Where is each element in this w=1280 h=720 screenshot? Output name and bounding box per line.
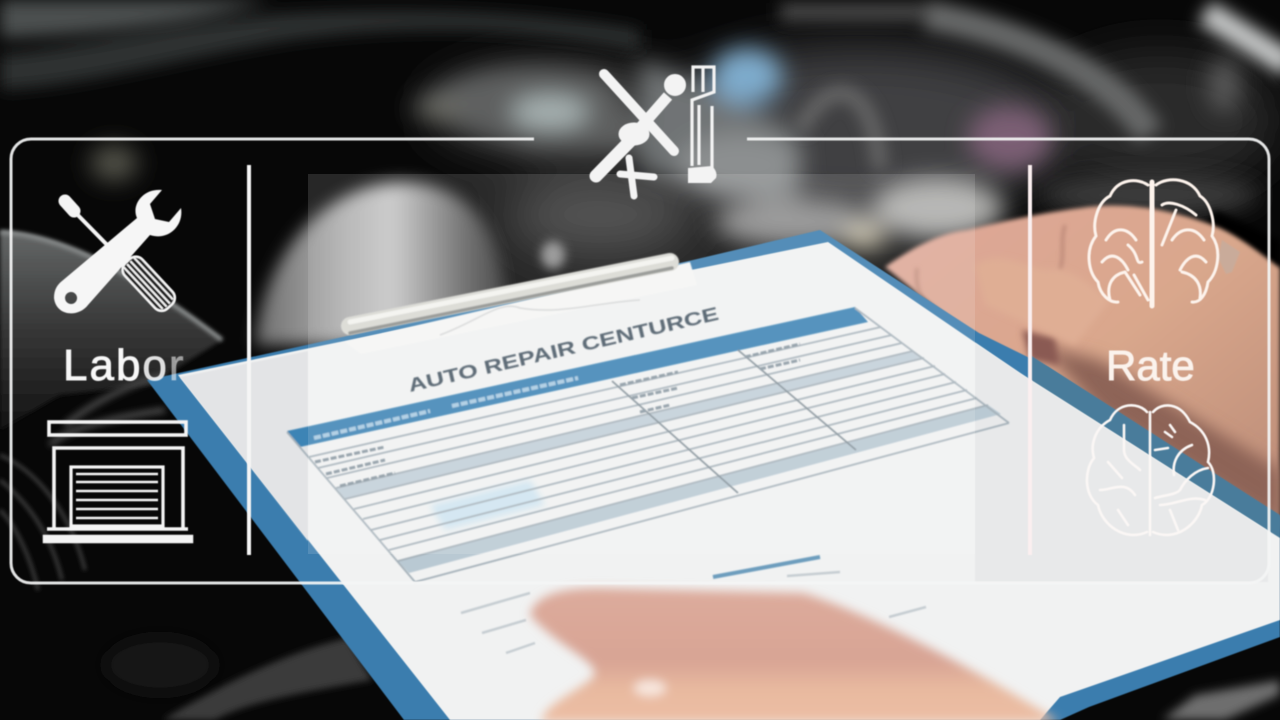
icon: top brain [1089,180,1218,306]
form heading: AUTO REPAIR CENTURCE [406,304,721,396]
divider: left [247,165,251,555]
outer frame with top gap [11,139,1269,583]
label: Labor: Labor [63,341,186,390]
panel: labor [44,190,192,542]
icon: garage [44,422,192,542]
clip bar [350,258,672,333]
paper tint inside the frame [180,351,308,541]
hand writing at the bottom [530,588,1060,720]
clip sheet [345,262,697,354]
form table [287,307,1009,653]
hand holding the clipboard [885,205,1280,530]
clipboard with repair form [147,230,1280,720]
label: Rate: Rate [1106,342,1195,389]
wristwatch band [1218,240,1240,274]
engine hose behind panel [255,182,505,345]
icon: screwdriver and wrench [54,190,181,315]
clipboard board [147,230,1280,720]
top centre icon: crossed tools [596,67,716,196]
divider: right [1028,165,1032,555]
panel: rate [1087,180,1218,535]
icon: bottom brain [1087,405,1214,535]
translucent centre panel [308,174,975,554]
paper sheet [178,242,1280,720]
